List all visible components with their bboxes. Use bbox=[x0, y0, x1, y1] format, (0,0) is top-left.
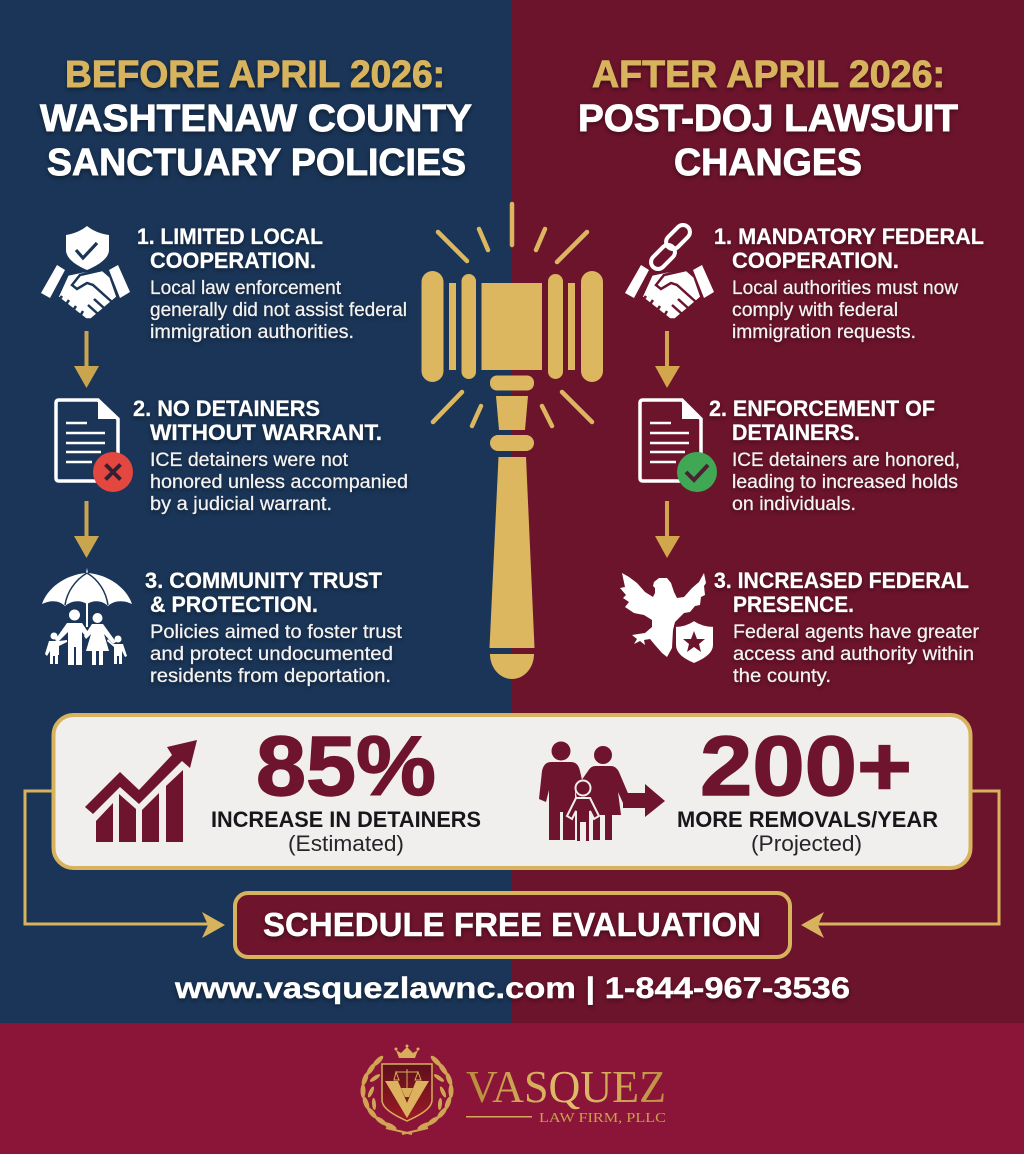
text: after step 1: Local authorities must now bbox=[732, 278, 958, 299]
button: schedule free evaluation bbox=[235, 893, 790, 957]
text: after step 3: the county. bbox=[733, 666, 831, 687]
text: after step 3: access and authority within bbox=[733, 644, 974, 665]
text: before step 1 bbox=[137, 224, 407, 343]
text: after step 2: 2. ENFORCEMENT OF bbox=[709, 396, 935, 421]
icon: document with red x bbox=[56, 399, 133, 492]
text: after step 1 bbox=[714, 224, 984, 343]
title: before: SANCTUARY POLICIES bbox=[47, 142, 466, 184]
text: after step 1: COOPERATION. bbox=[732, 248, 899, 273]
text: before step 3 bbox=[145, 568, 403, 687]
text: before step 3: residents from deportation. bbox=[150, 666, 391, 687]
stat: 85 percent: (Estimated) bbox=[288, 831, 404, 856]
panel: before background bbox=[0, 0, 512, 1024]
title: after: POST-DOJ LAWSUIT bbox=[578, 98, 958, 140]
stat: 200 plus: MORE REMOVALS/YEAR bbox=[677, 807, 938, 832]
panel: after background bbox=[512, 0, 1024, 1024]
title: after: AFTER APRIL 2026: bbox=[592, 54, 945, 96]
text: before step 2: honored unless accompanied bbox=[150, 472, 408, 493]
text: before step 1: immigration authorities. bbox=[150, 322, 354, 343]
text: before step 3: and protect undocumented bbox=[150, 644, 393, 665]
text: before step 2: ICE detainers were not bbox=[150, 450, 349, 471]
text: after step 2 bbox=[709, 396, 960, 515]
logo: Vasquez Law Firm bbox=[360, 1044, 666, 1134]
stat: 85 percent bbox=[211, 719, 481, 856]
arrow: after step 2 to 3 bbox=[655, 501, 680, 558]
title: after: CHANGES bbox=[674, 142, 862, 184]
icon: shield crest bbox=[382, 1064, 432, 1121]
text: after step 2: DETAINERS. bbox=[732, 420, 860, 445]
text: before step 3: Policies aimed to foster trust bbox=[150, 622, 403, 643]
title: after bbox=[578, 54, 958, 184]
arrow: before step 2 to 3 bbox=[74, 501, 99, 558]
stat: 85 percent: INCREASE IN DETAINERS bbox=[211, 807, 481, 832]
text: after step 3: Federal agents have greater bbox=[733, 622, 980, 643]
icon: eagle with star badge bbox=[620, 573, 714, 664]
arrow: before step 1 to 2 bbox=[74, 331, 99, 388]
icon: umbrella over family bbox=[42, 568, 132, 665]
title: before bbox=[40, 54, 472, 184]
text: before step 1: COOPERATION. bbox=[150, 248, 316, 273]
title: before: BEFORE APRIL 2026: bbox=[65, 54, 445, 96]
text: after step 3: 3. INCREASED FEDERAL bbox=[714, 568, 969, 593]
text: before step 1: generally did not assist federal bbox=[150, 300, 407, 321]
text: after step 2: leading to increased holds bbox=[732, 472, 958, 493]
text: before step 2: 2. NO DETAINERS bbox=[133, 396, 320, 421]
text: before step 2: WITHOUT WARRANT. bbox=[150, 420, 382, 445]
stat: 200 plus: (Projected) bbox=[751, 831, 862, 856]
panel: statistics bbox=[54, 715, 970, 868]
panel: footer band bbox=[0, 1023, 1024, 1154]
icon: rising bar chart bbox=[85, 740, 197, 842]
text: before step 2 bbox=[133, 396, 408, 515]
icon: shield and handshake bbox=[41, 226, 130, 320]
arrow: right connector to button bbox=[801, 791, 999, 938]
button: schedule free evaluation: SCHEDULE FREE EVALUATION bbox=[263, 906, 761, 943]
text: after step 1: comply with federal bbox=[732, 300, 898, 321]
arrow: left connector to button bbox=[25, 791, 225, 938]
wordmark: VASQUEZ bbox=[466, 1061, 666, 1112]
title: before: WASHTENAW COUNTY bbox=[40, 98, 472, 140]
stat: 85 percent: 85% bbox=[256, 719, 436, 813]
tagline: LAW FIRM, PLLC bbox=[539, 1111, 666, 1126]
text: before step 3: & PROTECTION. bbox=[150, 592, 318, 617]
text: before step 1: Local law enforcement bbox=[150, 278, 342, 299]
icon: right laurel bbox=[402, 1054, 454, 1134]
text: after step 1: 1. MANDATORY FEDERAL bbox=[714, 224, 984, 249]
text: before step 1: 1. LIMITED LOCAL bbox=[137, 224, 323, 249]
text: after step 3: PRESENCE. bbox=[733, 592, 854, 617]
icon: chain link and handshake bbox=[625, 222, 714, 320]
stat: 200 plus: 200+ bbox=[700, 719, 912, 813]
text: after step 1: immigration requests. bbox=[732, 322, 916, 343]
icon: left laurel bbox=[360, 1054, 412, 1134]
stat: 200 plus bbox=[677, 719, 938, 856]
text: after step 3 bbox=[714, 568, 980, 687]
icon: family with arrow bbox=[539, 742, 665, 842]
icon: document with green check bbox=[640, 399, 717, 492]
contact line: www.vasquezlawnc.com | 1-844-967-3536 bbox=[174, 972, 850, 1005]
icon: gavel with impact rays bbox=[422, 204, 603, 679]
text: after step 2: on individuals. bbox=[732, 494, 856, 515]
text: before step 3: 3. COMMUNITY TRUST bbox=[145, 568, 383, 593]
arrow: after step 1 to 2 bbox=[655, 331, 680, 388]
text: before step 2: by a judicial warrant. bbox=[150, 494, 332, 515]
icon: crown bbox=[394, 1044, 420, 1058]
text: after step 2: ICE detainers are honored, bbox=[732, 450, 960, 471]
